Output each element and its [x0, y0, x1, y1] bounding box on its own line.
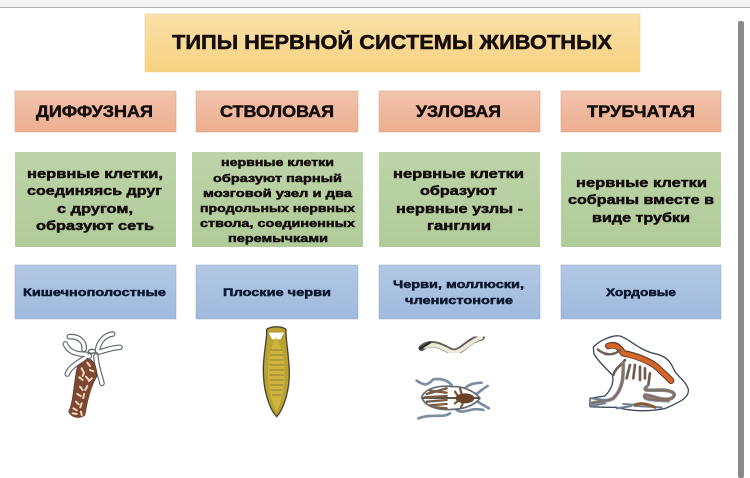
panel: diffuse description: нервные клетки, — [27, 166, 163, 181]
panel: trunk description — [192, 152, 363, 247]
panel: type header nodal: УЗЛОВАЯ — [416, 103, 501, 121]
panel: diffuse description: с другом, — [57, 201, 133, 216]
panel: type header trunk: СТВОЛОВАЯ — [220, 103, 334, 121]
panel: diffuse description: соединяясь друг — [27, 183, 163, 198]
panel: trunk description: нервные клетки — [221, 157, 334, 169]
panel: cnidarians group — [15, 265, 176, 319]
panel: nodal description — [379, 152, 540, 247]
title — [145, 14, 640, 72]
panel: type header tubular: ТРУБЧАТАЯ — [587, 103, 695, 121]
panel: chordates group: Хордовые — [606, 287, 676, 299]
panel: tubular description: нервные клетки — [576, 175, 707, 190]
panel: type header trunk — [196, 91, 358, 132]
scrollbar — [738, 21, 744, 478]
panel: flatworms group: Плоские черви — [223, 287, 331, 299]
panel: tubular description: собраны вместе в — [568, 192, 714, 207]
icon: frog — [590, 336, 688, 411]
panel: worms molluscs arthropods group: членистоногие — [405, 295, 513, 307]
panel: trunk description: образуют парный — [213, 173, 342, 185]
panel: type header nodal — [379, 91, 540, 132]
icon: flatworm — [263, 327, 289, 417]
panel: diffuse description — [15, 152, 176, 247]
panel: trunk description: перемычками — [228, 233, 328, 245]
panel: worms molluscs arthropods group: Черви, моллюски, — [393, 279, 524, 291]
panel: nodal description: образуют — [420, 183, 497, 198]
panel: tubular description: виде трубки — [592, 210, 690, 225]
icon: hydra — [65, 334, 120, 417]
panel: type header tubular — [561, 91, 721, 132]
icon: insect — [417, 379, 489, 418]
panel: chordates group — [561, 265, 721, 319]
panel: trunk description: мозговой узел и два — [203, 188, 353, 200]
icon: earthworm — [420, 337, 482, 352]
panel: nodal description: нервные узлы - — [396, 201, 523, 216]
panel: trunk description: ствола, соединенных — [200, 218, 356, 230]
panel: flatworms group — [196, 265, 358, 319]
title: ТИПЫ НЕРВНОЙ СИСТЕМЫ ЖИВОТНЫХ — [172, 30, 613, 54]
panel: type header diffuse: ДИФФУЗНАЯ — [36, 103, 153, 121]
panel: type header diffuse — [15, 91, 176, 132]
panel: worms molluscs arthropods group — [379, 265, 540, 319]
panel: diffuse description: образуют сеть — [36, 218, 154, 233]
panel: nodal description: нервные клетки — [393, 166, 524, 181]
panel: nodal description: ганглии — [427, 218, 491, 233]
panel: tubular description — [561, 152, 721, 247]
panel: trunk description: продольных нервных — [200, 203, 356, 215]
panel: cnidarians group: Кишечнополостные — [23, 287, 166, 299]
